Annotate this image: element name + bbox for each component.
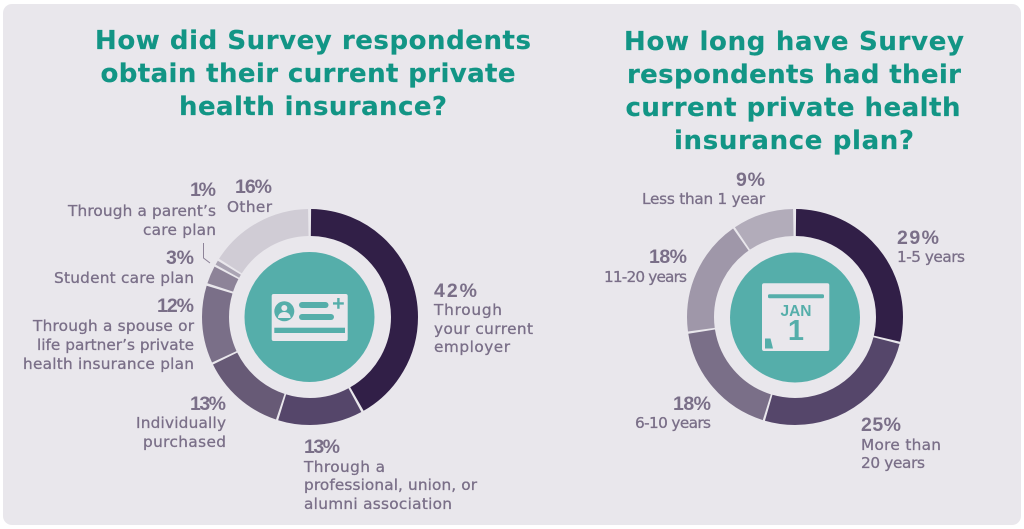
- icon: calendar: [730, 252, 860, 382]
- label: 1% parent's care plan: care plan: [143, 221, 216, 239]
- heading: plan duration: current private health: [626, 93, 960, 123]
- label: 13% individually purchased: 13%: [190, 393, 226, 415]
- label: 25% more than 20 years: 25%: [861, 414, 901, 436]
- label: 12% spouse or life partner: 12%: [157, 295, 194, 317]
- label: 1% parent's care plan: 1%: [190, 179, 216, 201]
- label: 18% 6-10 years: 6-10 years: [635, 414, 711, 432]
- label: 29% 1-5 years: 29%: [897, 227, 939, 249]
- heading: obtain insurance: obtain their current private: [100, 59, 516, 89]
- label: 18% 11-20 years: 18%: [649, 246, 687, 268]
- donut chart: obtain insurance: [216, 222, 404, 412]
- heading: obtain insurance: How did Survey respondents: [95, 26, 531, 56]
- label: 13% professional association: alumni association: [304, 495, 452, 513]
- label: 42% through your current employer: Through: [433, 301, 502, 319]
- label: 9% less than 1 year: 9%: [736, 169, 765, 191]
- icon: calendar: 1: [788, 315, 804, 347]
- label: 29% 1-5 years: 1-5 years: [897, 248, 965, 266]
- panel: how long respondents had plan: [604, 27, 965, 472]
- label: 1% parent's care plan: Through a parent’s: [67, 202, 216, 220]
- label: 25% more than 20 years: More than: [861, 436, 941, 454]
- label: 13% individually purchased: purchased: [143, 433, 226, 451]
- label: 3% student care plan: 3%: [166, 247, 194, 269]
- label: 13% professional association: 13%: [304, 436, 340, 458]
- label: 12% spouse or life partner: life partner’s private: [37, 336, 194, 354]
- label: 12% spouse or life partner: Through a spouse or: [32, 317, 195, 335]
- heading: plan duration: How long have Survey: [624, 27, 964, 57]
- label: 42% through your current employer: 42%: [434, 280, 477, 302]
- label: 25% more than 20 years: 20 years: [861, 454, 925, 472]
- label: 13% professional association: professional, union, or: [304, 476, 478, 494]
- panel: how respondents obtained insurance: [23, 26, 533, 513]
- label: 16% other: 16%: [235, 176, 272, 198]
- heading: plan duration: respondents had their: [627, 60, 961, 90]
- label: 9% less than 1 year: Less than 1 year: [642, 190, 766, 208]
- donut chart: plan duration: [700, 222, 890, 412]
- icon: calendar: JAN: [780, 303, 812, 320]
- leader line: 1% label: [204, 243, 210, 263]
- label: 12% spouse or life partner: health insurance plan: [23, 355, 194, 373]
- icon: insurance card: [244, 252, 374, 382]
- label: 13% professional association: Through a: [303, 458, 385, 476]
- label: 42% through your current employer: employer: [434, 338, 511, 356]
- label: 18% 11-20 years: 11-20 years: [604, 268, 687, 286]
- label: 16% other: Other: [227, 198, 273, 216]
- label: 42% through your current employer: your current: [434, 320, 533, 338]
- label: 18% 6-10 years: 18%: [673, 393, 711, 415]
- label: 13% individually purchased: Individually: [136, 414, 226, 432]
- heading: obtain insurance: health insurance?: [179, 92, 447, 122]
- label: 3% student care plan: Student care plan: [54, 269, 194, 287]
- heading: plan duration: insurance plan?: [674, 126, 914, 156]
